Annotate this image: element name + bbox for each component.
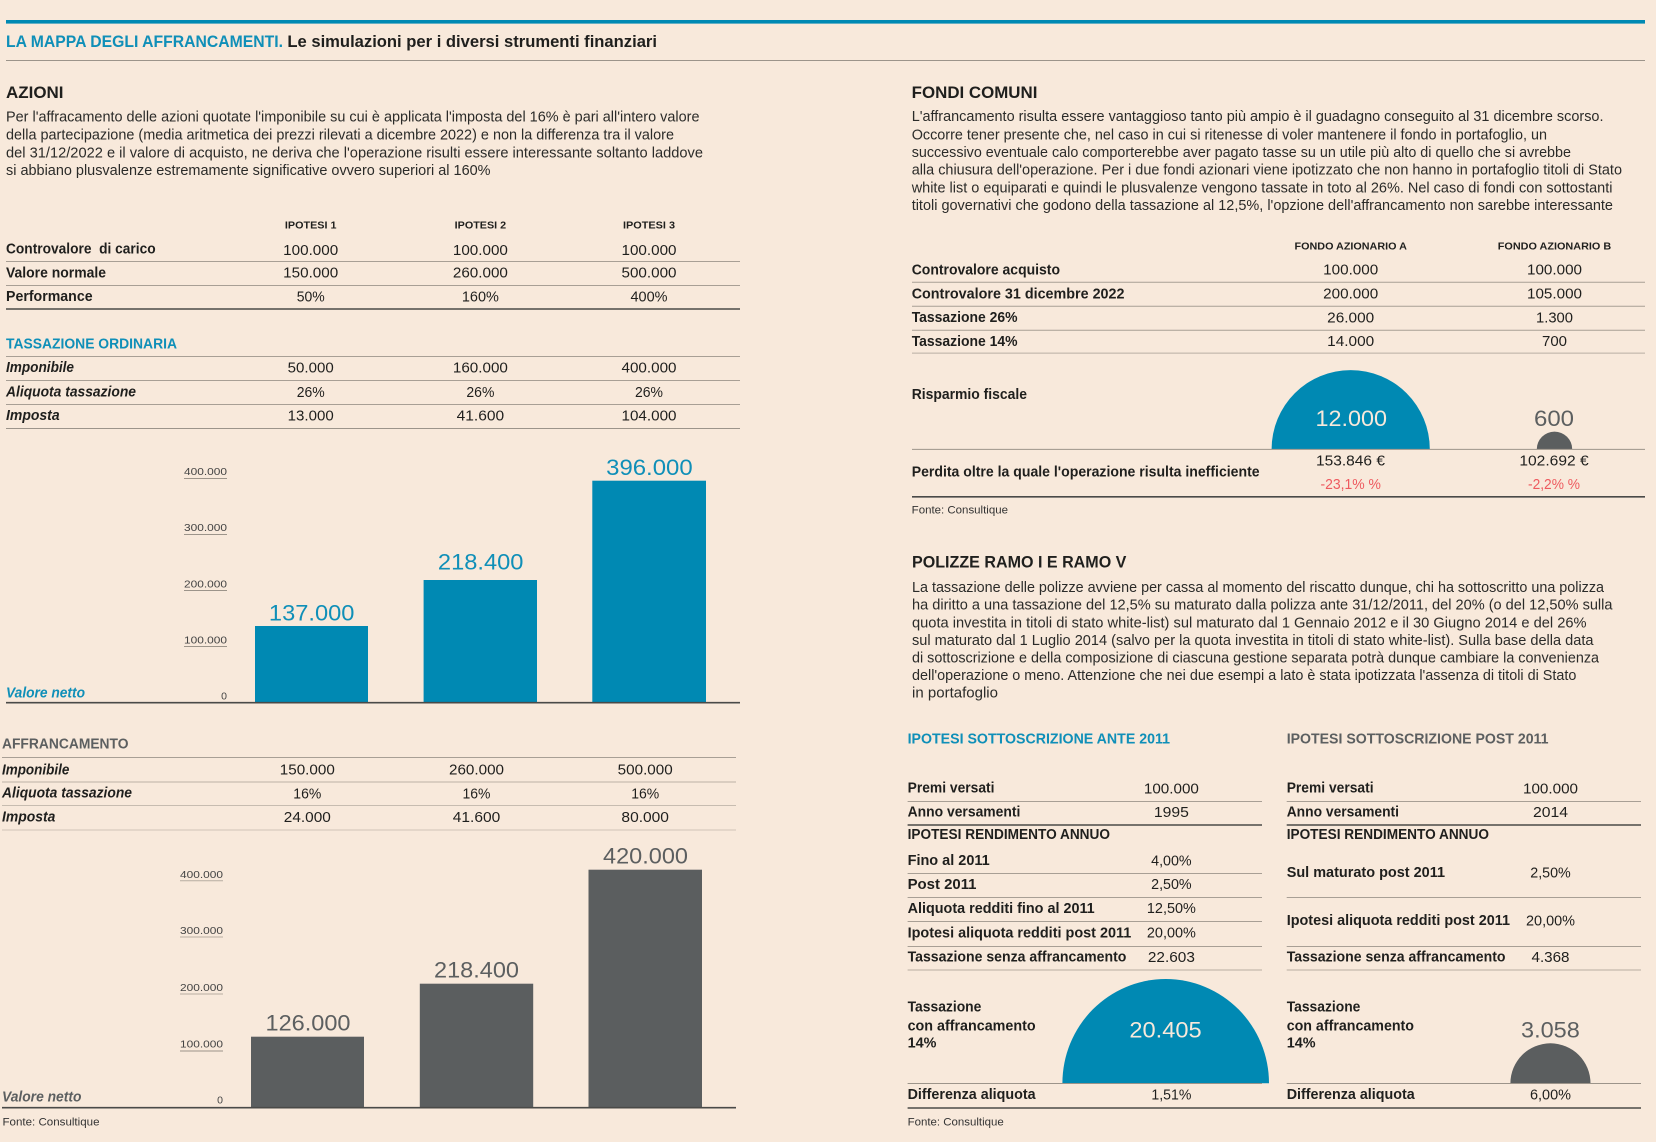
table: affrancamento: Imponibile (2, 762, 69, 778)
table: ipotesi ante 2011: 100.000 (1144, 781, 1199, 797)
table: ipotesi: IPOTESI 1 (285, 220, 337, 232)
table: ipotesi ante 2011: Anno versamenti (908, 805, 1020, 821)
text block: polizze intro: sul maturato dal 1 Luglio 2014 (salvo per la quota investita in titoli di stato white-list). Sulla base della data (912, 633, 1594, 649)
heading: polizze: POLIZZE RAMO I E RAMO V (912, 553, 1126, 571)
heading: fondi comuni: FONDI COMUNI (912, 84, 1037, 102)
bar chart: valore netto tassazione ordinaria: 100.000 (184, 635, 227, 647)
table: tassazione ordinaria: 41.600 (457, 409, 504, 425)
bar chart: valore netto affrancamento: 126.000 (266, 1011, 350, 1036)
heading: azioni: AZIONI (6, 84, 64, 102)
bar chart: valore netto tassazione ordinaria: 200.000 (184, 579, 227, 591)
table: ipotesi post 2011: Ipotesi aliquota redditi post 2011 (1287, 913, 1510, 929)
chart: tassazione con affrancamento ante 2011: 20.405 (1129, 1018, 1202, 1043)
table: ipotesi post 2011: Tassazione senza affrancamento (1287, 950, 1506, 966)
text block: azioni intro: si abbiano plusvalenze estremamente significative ovvero superiori al 160% (6, 163, 490, 179)
text block: fondi intro (911, 109, 1622, 214)
table: fondi azionari: 200.000 (1323, 286, 1378, 302)
table row: differenza aliquota post 2011 (1287, 1087, 1571, 1103)
table: tassazione ordinaria: 13.000 (288, 409, 334, 425)
table: affrancamento: 16% (293, 786, 321, 802)
bar chart: valore netto tassazione ordinaria: 300.000 (184, 522, 227, 534)
table: ipotesi ante 2011: 4,00% (1151, 854, 1192, 870)
table: fondi azionari: 100.000 (1527, 262, 1582, 278)
bar chart: valore netto affrancamento: Valore netto (2, 1090, 82, 1106)
table: tassazione ordinaria: 400.000 (622, 361, 676, 377)
table: ipotesi post 2011: IPOTESI RENDIMENTO ANNUO (1287, 827, 1489, 843)
bar chart: valore netto affrancamento: 0 (217, 1095, 223, 1107)
bar chart: valore netto affrancamento: 420.000 (603, 843, 688, 868)
table: ipotesi ante 2011: 22.603 (1148, 950, 1195, 966)
table: ipotesi ante 2011: 2,50% (1151, 877, 1192, 893)
table: affrancamento: 80.000 (621, 810, 669, 826)
bar chart: valore netto affrancamento: 400.000 (180, 869, 223, 881)
table row: differenza aliquota ante 2011 (908, 1087, 1191, 1103)
table: fondi azionari: Tassazione 26% (912, 310, 1018, 326)
table row: perdita: 153.846 € (1316, 454, 1385, 470)
text block: fondi intro: successivo eventuale calo comporterebbe aver pagato tasse su un utile più alto di quello che si avrebbe (912, 145, 1571, 161)
table: ipotesi: 260.000 (453, 266, 508, 282)
table row: perdita (912, 454, 1645, 497)
table: ipotesi post 2011: 20,00% (1526, 913, 1575, 929)
table: ipotesi: 100.000 (622, 243, 676, 259)
title: LA MAPPA DEGLI AFFRANCAMENTI. (6, 33, 283, 51)
bar chart: valore netto affrancamento: 300.000 (180, 925, 223, 937)
table: ipotesi ante 2011: Tassazione senza affrancamento (908, 950, 1127, 966)
table: fondi azionari (912, 240, 1645, 353)
table: affrancamento: 500.000 (618, 763, 673, 779)
table: ipotesi ante 2011 (908, 731, 1262, 970)
top accent bar (6, 20, 1645, 24)
panel: polizze (908, 553, 1641, 1128)
table: ipotesi ante 2011: IPOTESI SOTTOSCRIZIONE ANTE 2011 (908, 731, 1170, 747)
text block: polizze intro: dell'operazione o meno. Attenzione che nei due esempi a lato è stata ipotizzata l'assenza di titoli di Stato (912, 668, 1576, 684)
bar chart: valore netto tassazione ordinaria: 218.400 (438, 549, 523, 574)
table: ipotesi: 100.000 (453, 243, 508, 259)
table row: differenza aliquota ante 2011: 1,51% (1151, 1087, 1191, 1103)
table: ipotesi: Valore normale (6, 265, 106, 281)
table: fondi azionari: 1.300 (1536, 310, 1573, 326)
bar chart: valore netto affrancamento: 200.000 (180, 982, 223, 994)
text block: azioni intro: della partecipazione (media aritmetica dei prezzi rilevati a dicembre 2022) e non la differenza tra il valore (6, 127, 674, 143)
table: ipotesi post 2011: Anno versamenti (1287, 805, 1399, 821)
bar chart: valore netto tassazione ordinaria: 0 (221, 690, 227, 702)
table: fondi azionari: FONDO AZIONARIO B (1498, 240, 1612, 252)
table: tassazione ordinaria (5, 337, 740, 428)
table row: differenza aliquota post 2011: Differenza aliquota (1287, 1087, 1416, 1103)
chart: tassazione con affrancamento ante 2011 (908, 979, 1269, 1084)
chart: tassazione con affrancamento post 2011: con affrancamento (1287, 1019, 1414, 1035)
table: tassazione ordinaria: Aliquota tassazione (5, 384, 136, 400)
table: ipotesi: IPOTESI 2 (455, 220, 506, 232)
table: ipotesi post 2011: 4.368 (1532, 950, 1570, 966)
table: ipotesi: IPOTESI 3 (623, 220, 675, 232)
table: tassazione ordinaria: 160.000 (453, 361, 508, 377)
text block: azioni intro: Per l'affracamento delle azioni quotate l'imponibile su cui è applicata l'imposta del 16% è pari all'intero valore (6, 110, 700, 126)
table: affrancamento: 150.000 (280, 763, 335, 779)
table: ipotesi ante 2011: 12,50% (1147, 901, 1196, 917)
table: tassazione ordinaria: Imponibile (6, 360, 74, 376)
source note: azioni: Fonte: Consultique (2, 1116, 100, 1128)
table: affrancamento: 16% (462, 786, 491, 802)
panel: fondi comuni (911, 84, 1645, 517)
table: ipotesi post 2011 (1287, 731, 1641, 970)
table: fondi azionari: 14.000 (1327, 334, 1374, 350)
text block: polizze intro: in portafoglio (912, 686, 998, 702)
table: ipotesi ante 2011: 20,00% (1147, 926, 1196, 942)
table row: perdita: 102.692 € (1519, 454, 1589, 470)
table: affrancamento: 24.000 (284, 810, 331, 826)
chart: tassazione con affrancamento post 2011: 14% (1287, 1036, 1316, 1052)
bar chart: valore netto affrancamento: 100.000 (180, 1039, 223, 1051)
table row: perdita: Perdita oltre la quale l'operazione risulta inefficiente (912, 464, 1260, 480)
bar chart: valore netto tassazione ordinaria: 396.000 (606, 455, 693, 480)
table: ipotesi (6, 220, 740, 309)
chart: tassazione con affrancamento ante 2011: Tassazione (908, 1000, 981, 1016)
table: tassazione ordinaria: TASSAZIONE ORDINARIA (6, 337, 177, 353)
chart: risparmio fiscale (912, 370, 1645, 449)
table: ipotesi ante 2011: Aliquota redditi fino al 2011 (908, 901, 1095, 917)
source note: polizze: Fonte: Consultique (908, 1116, 1004, 1128)
text block: polizze intro: La tassazione delle polizze avviene per cassa al momento del riscatto dunque, chi ha sottoscritto una polizza (912, 580, 1605, 596)
table: ipotesi: Controvalore di carico (6, 241, 156, 257)
table: affrancamento: 16% (631, 786, 659, 802)
bar chart: valore netto tassazione ordinaria: Valore netto (6, 686, 85, 702)
chart: tassazione con affrancamento post 2011: Tassazione (1287, 1000, 1360, 1016)
text block: azioni intro: del 31/12/2022 e il valore di acquisto, ne deriva che l'operazione risulti essere interessante soltanto laddove (6, 145, 703, 161)
chart: tassazione con affrancamento ante 2011: con affrancamento (908, 1019, 1036, 1035)
table: affrancamento: 260.000 (449, 763, 504, 779)
table: ipotesi: 100.000 (283, 243, 338, 259)
bar chart: valore netto tassazione ordinaria: 400.000 (184, 466, 227, 478)
text block: fondi intro: titoli governativi che godono della tassazione al 12,5%, l'opzione dell'affrancamento non sarebbe interessante (912, 198, 1613, 214)
table: fondi azionari: Controvalore 31 dicembre 2022 (912, 286, 1124, 302)
table: ipotesi ante 2011: IPOTESI RENDIMENTO ANNUO (908, 827, 1110, 843)
table: fondi azionari: Tassazione 14% (912, 334, 1018, 350)
text block: polizze intro: ha diritto a una tassazione del 12,5% su maturato dalla polizza ante 31/12/2011, del 20% (o del 12,50% sulla (912, 597, 1613, 613)
table: ipotesi ante 2011: 1995 (1154, 805, 1189, 821)
chart: tassazione con affrancamento post 2011 (1287, 1000, 1641, 1084)
table: tassazione ordinaria: 50.000 (288, 361, 334, 377)
table: affrancamento: AFFRANCAMENTO (2, 736, 128, 752)
table: fondi azionari: FONDO AZIONARIO A (1295, 240, 1407, 252)
title (6, 33, 657, 51)
chart: tassazione con affrancamento ante 2011: 14% (908, 1036, 936, 1052)
text block: polizze intro: quota investita in titoli di stato white-list) sul maturato dal 1 Gennaio 2012 e il 30 Giugno 2014 e del 26% (912, 615, 1587, 631)
text block: polizze intro: di sottoscrizione e della composizione di ciascuna gestione separata potrà dunque cambiare la convenienza (912, 650, 1600, 666)
chart: risparmio fiscale: Risparmio fiscale (912, 387, 1027, 403)
table: fondi azionari: 100.000 (1323, 262, 1378, 278)
table: tassazione ordinaria: 26% (297, 385, 325, 401)
table row: perdita: -23,1% % (1320, 477, 1381, 493)
bar chart: valore netto affrancamento (2, 843, 736, 1108)
table: tassazione ordinaria: 26% (635, 385, 663, 401)
chart: tassazione con affrancamento post 2011: 3.058 (1521, 1018, 1580, 1043)
table: tassazione ordinaria: 26% (466, 385, 494, 401)
table: ipotesi: Performance (6, 289, 93, 305)
table: ipotesi post 2011: 2,50% (1530, 866, 1571, 882)
table: tassazione ordinaria: 104.000 (622, 409, 676, 425)
text block: fondi intro: Occorre tener presente che, nel caso in cui si ritenesse di voler mantenere il fondo in portafoglio, un (912, 127, 1547, 143)
chart: risparmio fiscale: 12.000 (1316, 406, 1387, 431)
table: ipotesi post 2011: 2014 (1533, 805, 1568, 821)
table: affrancamento: Imposta (2, 810, 55, 826)
table: ipotesi ante 2011: Fino al 2011 (908, 853, 990, 869)
title: Le simulazioni per i diversi strumenti finanziari (287, 33, 657, 51)
table: ipotesi ante 2011: Post 2011 (908, 877, 976, 893)
table row: perdita: -2,2% % (1528, 477, 1580, 493)
table: ipotesi post 2011: 100.000 (1523, 781, 1578, 797)
table: ipotesi ante 2011: Ipotesi aliquota redditi post 2011 (908, 925, 1131, 941)
table: ipotesi: 50% (297, 290, 325, 306)
table: ipotesi: 150.000 (283, 266, 338, 282)
table row: differenza aliquota post 2011: 6,00% (1530, 1087, 1571, 1103)
table: fondi azionari: 26.000 (1327, 310, 1374, 326)
table: ipotesi ante 2011: Premi versati (908, 781, 994, 797)
table: ipotesi post 2011: Premi versati (1287, 781, 1374, 797)
text block: polizze intro (912, 580, 1613, 702)
table: affrancamento: 41.600 (453, 810, 500, 826)
text block: fondi intro: alla chiusura dell'operazione. Per i due fondi azionari viene ipotizzato che non hanno in portafoglio titoli di Stato (912, 163, 1622, 179)
panel: azioni (1, 84, 740, 1128)
bar chart: valore netto tassazione ordinaria: 137.000 (269, 600, 354, 625)
source note: fondi: Fonte: Consultique (912, 505, 1008, 517)
table: ipotesi post 2011: IPOTESI SOTTOSCRIZIONE POST 2011 (1287, 731, 1548, 747)
table: ipotesi: 400% (630, 290, 668, 306)
table: affrancamento (1, 736, 736, 830)
table: affrancamento: Aliquota tassazione (1, 786, 132, 802)
text block: azioni intro (6, 110, 703, 179)
bar chart: valore netto affrancamento: 218.400 (434, 958, 519, 983)
table: ipotesi: 160% (462, 290, 499, 306)
table: fondi azionari: Controvalore acquisto (912, 262, 1060, 278)
text block: fondi intro: white list o equiparati e quindi le plusvalenze vengono tassate in toto al 26%. Nel caso di fondi con sottostanti (911, 180, 1612, 196)
table: fondi azionari: 700 (1542, 334, 1567, 350)
table: fondi azionari: 105.000 (1527, 286, 1582, 302)
bar chart: valore netto tassazione ordinaria (6, 455, 740, 703)
table: ipotesi: 500.000 (622, 266, 676, 282)
table: ipotesi post 2011: Sul maturato post 2011 (1287, 865, 1445, 881)
table: tassazione ordinaria: Imposta (6, 408, 60, 424)
chart: risparmio fiscale: 600 (1534, 406, 1574, 431)
text block: fondi intro: L'affrancamento risulta essere vantaggioso tanto più ampio è il guadagno conseguito al 31 dicembre scorso. (912, 109, 1604, 125)
table row: differenza aliquota ante 2011: Differenza aliquota (908, 1087, 1037, 1103)
